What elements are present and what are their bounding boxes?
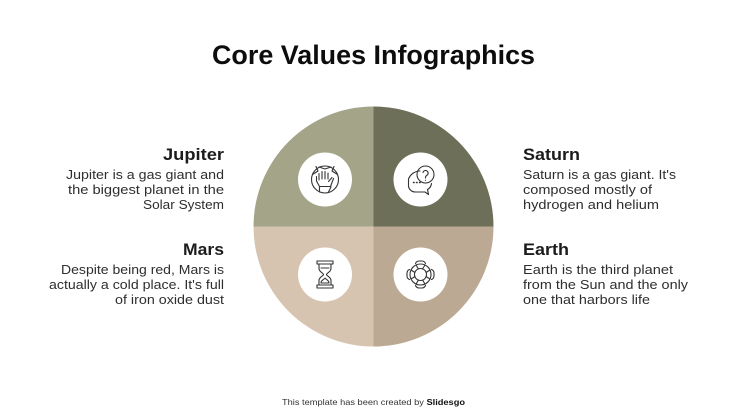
body: Jupiter: the biggest planet in the [68,183,224,197]
icon: hourglass [298,248,352,302]
icon: speech bubbles with question mark [394,152,448,206]
quadrant: top right [374,106,494,226]
heading: Jupiter: Jupiter [163,145,224,164]
quadrant: top left [254,106,374,226]
body: Saturn: Saturn is a gas giant. It's [523,168,676,182]
quadrant: bottom left [254,226,374,346]
body: Jupiter [66,168,224,212]
heading: Saturn: Saturn [523,145,580,164]
body: Mars: actually a cold place. It's full [49,278,224,292]
body: Mars [49,263,225,307]
body: Saturn: composed mostly of [523,183,653,197]
body: Mars: of iron oxide dust [115,293,225,307]
body: Saturn [523,168,676,212]
body: Earth: one that harbors life [523,293,650,307]
footer credit: This template has been created by Slidesgo [282,398,465,407]
text block: Jupiter [66,145,224,212]
body: Jupiter: Solar System [143,198,224,212]
text block: Earth [523,240,689,307]
body: Earth: Earth is the third planet [523,263,674,277]
heading: Earth: Earth [523,240,569,259]
quadrant: bottom right [374,226,494,346]
icon: life buoy [394,248,448,302]
icon: hand in circle [298,152,352,206]
body: Earth: from the Sun and the only [523,278,689,292]
body: Earth [523,263,689,307]
body: Mars: Despite being red, Mars is [61,263,224,277]
heading: Mars: Mars [183,240,224,259]
body: Saturn: hydrogen and helium [523,198,659,212]
text block: Mars [49,240,225,307]
text block: Saturn [523,145,676,212]
panel: quartered circle [254,106,494,346]
body: Jupiter: Jupiter is a gas giant and [66,168,224,182]
title: Core Values Infographics [212,40,535,70]
